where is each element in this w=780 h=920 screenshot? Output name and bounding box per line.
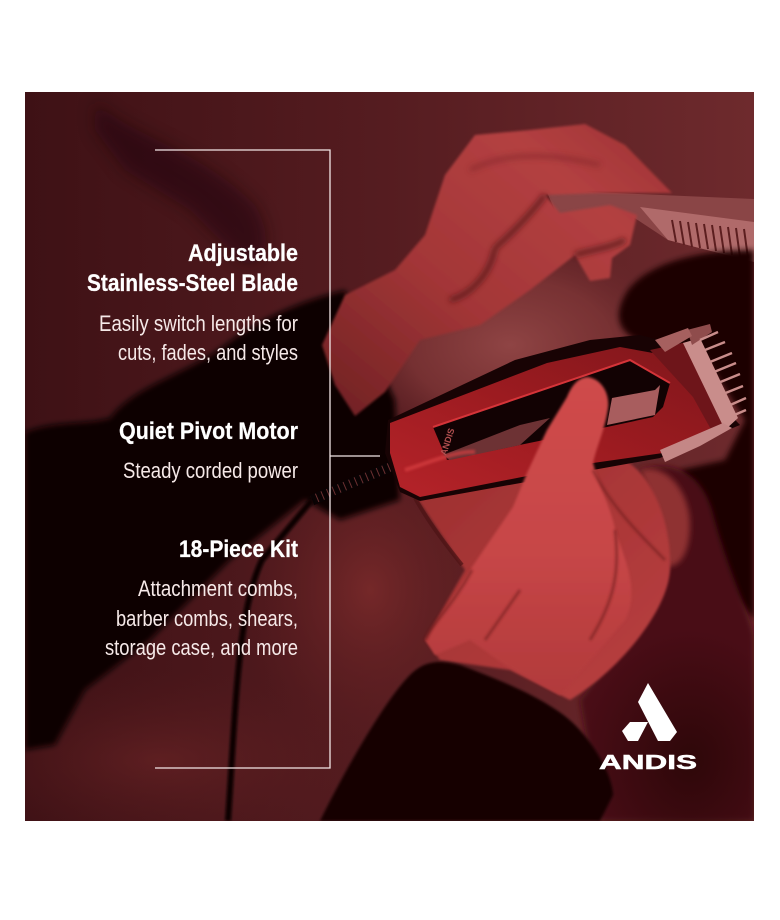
power cord [228, 465, 395, 821]
text: kit description: barber combs, shears, [116, 606, 298, 631]
dark jacket [320, 662, 613, 821]
text: kit description: Attachment combs, [138, 576, 298, 601]
logo: Andis [599, 683, 697, 774]
heading: adjustable stainless-steel blade [87, 240, 298, 297]
text: kit description: storage case, and more [105, 635, 298, 660]
heading: 18-piece kit: 18-Piece Kit [179, 536, 298, 563]
upper hand holding comb [322, 124, 672, 416]
text: motor description: Steady corded power [123, 458, 298, 483]
bracket lines [155, 150, 380, 768]
feature: kit [105, 536, 298, 660]
heading: adjustable stainless-steel blade: Adjustable [188, 240, 298, 267]
dark silhouette of the barber's shoulder [25, 290, 400, 750]
clipper: ANDIS [438, 427, 457, 457]
brick wall background [0, 235, 680, 850]
text: blade description: Easily switch lengths for [99, 311, 298, 336]
blade [650, 342, 722, 428]
comb [546, 190, 754, 262]
heading: quiet pivot motor: Quiet Pivot Motor [119, 418, 298, 445]
feature: motor [119, 418, 298, 483]
hair [619, 250, 754, 620]
ear and neck [580, 466, 754, 821]
lower hand behind clipper [415, 458, 670, 700]
text: blade description [99, 311, 298, 365]
icon: Andis A mark [622, 683, 677, 741]
text: kit description [105, 576, 298, 660]
heading: adjustable stainless-steel blade: Stainless-Steel Blade [87, 270, 298, 297]
wordmark: ANDIS [599, 752, 697, 774]
feature: adjustable blade [87, 240, 298, 365]
photo panel: barber clipping hair [25, 92, 754, 821]
text: blade description: cuts, fades, and styles [118, 340, 298, 365]
clipper [385, 324, 746, 501]
thumb on clipper [426, 377, 631, 695]
